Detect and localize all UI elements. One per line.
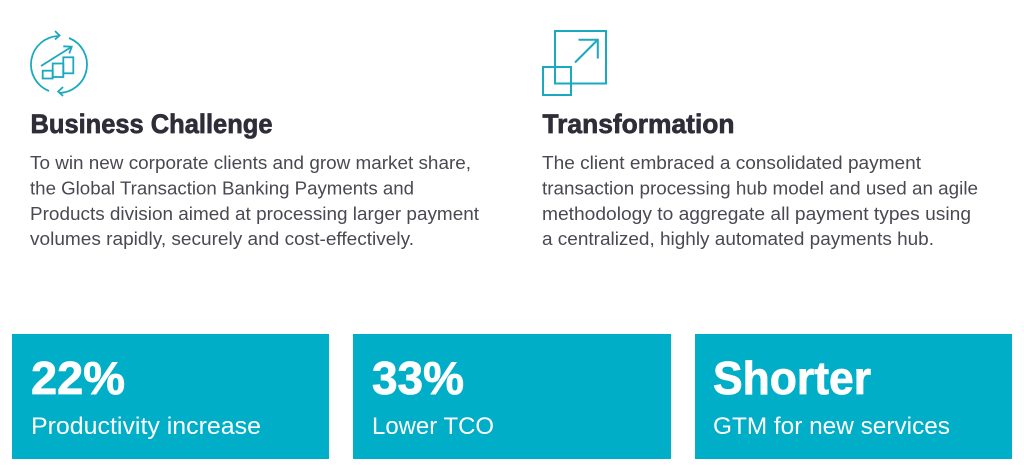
icon: growth chart in circular arrows bbox=[31, 31, 87, 96]
panel: shorter GTM bbox=[695, 334, 1012, 459]
text block: business challenge description: the Global Transaction Banking Payments and bbox=[30, 178, 414, 198]
text block: transformation description: The client embraced a consolidated payment bbox=[542, 153, 921, 173]
text block: transformation description: transaction processing hub model and used an agile bbox=[542, 178, 978, 198]
text block: business challenge description bbox=[30, 153, 479, 249]
panel: 33% lower TCO bbox=[353, 334, 671, 459]
text block: business challenge description: Products division aimed at processing larger payment bbox=[30, 204, 479, 224]
label: Productivity increase: Productivity increase bbox=[31, 413, 261, 440]
stat: 22%: 22% bbox=[31, 352, 125, 404]
label: Lower TCO: Lower TCO bbox=[372, 413, 494, 440]
stat: 33%: 33% bbox=[372, 352, 464, 404]
text block: business challenge description: To win new corporate clients and grow market share, bbox=[30, 153, 471, 173]
icon: expanding squares with arrow bbox=[543, 31, 606, 95]
text block: transformation description: a centralized, highly automated payments hub. bbox=[542, 229, 934, 249]
panel: 22% productivity increase bbox=[12, 334, 329, 459]
text block: transformation description: methodology to aggregate all payment types using bbox=[542, 204, 971, 224]
stat: Shorter: Shorter bbox=[713, 352, 871, 404]
heading: Transformation: Transformation bbox=[542, 109, 734, 139]
label: GTM for new services: GTM for new services bbox=[713, 413, 950, 440]
text block: business challenge description: volumes rapidly, securely and cost-effectively. bbox=[30, 229, 414, 249]
heading: Business Challenge: Business Challenge bbox=[30, 109, 272, 139]
text block: transformation description bbox=[542, 153, 978, 249]
